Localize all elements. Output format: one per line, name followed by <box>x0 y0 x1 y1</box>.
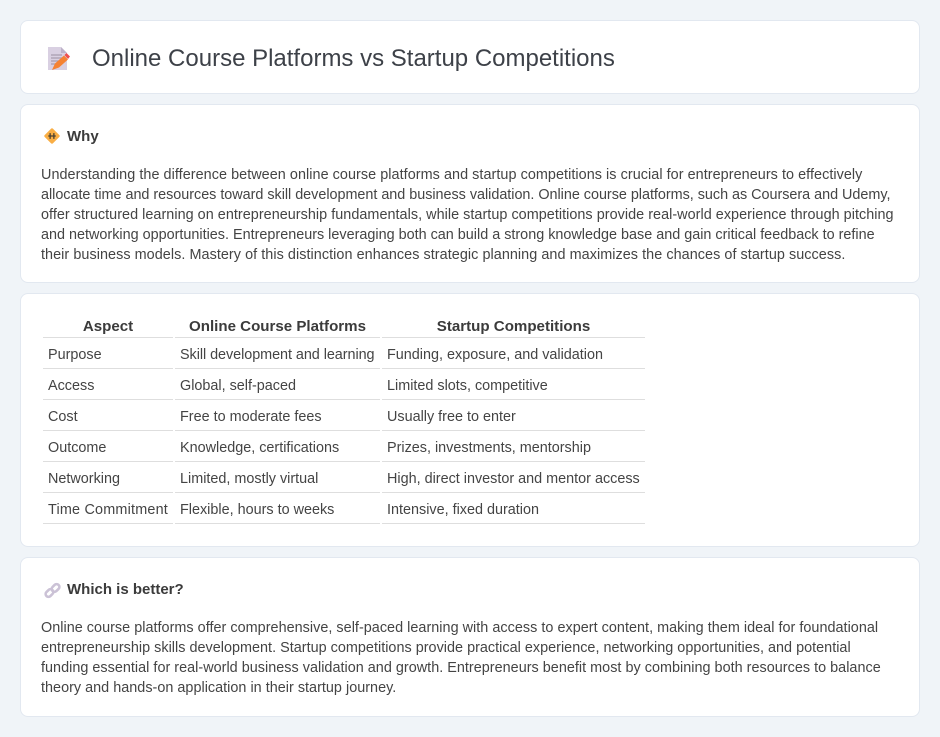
row: networking: Limited, mostly virtual <box>180 471 318 487</box>
text: why paragraph: their business models. Mastery of this distinction enhances strategic planning and maximizes the chances of startup success. <box>41 247 845 263</box>
icon: memo with pencil <box>48 47 70 70</box>
row: outcome: Outcome <box>48 440 106 456</box>
panel: title header <box>20 20 920 94</box>
heading: why: Why <box>67 128 99 145</box>
table header row <box>83 318 590 335</box>
row: time commitment: Intensive, fixed duration <box>387 502 539 518</box>
text: which is better paragraph <box>41 620 881 696</box>
panel: why <box>20 104 920 283</box>
row: time commitment: Flexible, hours to weeks <box>180 502 334 518</box>
row: outcome: Knowledge, certifications <box>180 440 339 456</box>
text: which is better paragraph: theory and hands-on application in their startup journey. <box>41 680 396 696</box>
row: access: Access <box>48 378 94 394</box>
row: networking: Networking <box>48 471 120 487</box>
row: purpose: Skill development and learning <box>180 347 374 363</box>
row: networking: High, direct investor and mentor access <box>387 471 640 487</box>
table: comparison <box>43 318 645 524</box>
text: which is better paragraph: Online course platforms offer comprehensive, self-paced learning with access to expert content, making them ideal for foundational <box>41 620 878 636</box>
table header row: Aspect <box>83 318 133 335</box>
text: which is better paragraph: entrepreneurship skills development. Startup competitions provide practical experience, networking opportunities, and potential <box>41 640 851 656</box>
text: why paragraph: Understanding the difference between online course platforms and startup competitions is crucial for entrepreneurs to effectively <box>41 167 862 183</box>
icon: link <box>44 582 61 598</box>
panel: comparison table <box>20 293 920 547</box>
row: cost: Usually free to enter <box>387 409 516 425</box>
row: networking <box>48 471 640 487</box>
row: cost <box>48 409 516 425</box>
row: cost: Free to moderate fees <box>180 409 322 425</box>
row: purpose <box>48 347 603 363</box>
text: which is better paragraph: funding essential for real-world business validation and growth. Entrepreneurs benefit most by combining both resources to balance <box>41 660 881 676</box>
row: outcome: Prizes, investments, mentorship <box>387 440 591 456</box>
row: outcome <box>48 440 591 456</box>
row: access: Global, self-paced <box>180 378 296 394</box>
row: access <box>48 378 548 394</box>
row: time commitment <box>48 502 539 518</box>
title: Online Course Platforms vs Startup Competitions <box>92 45 615 72</box>
text: why paragraph: offer structured learning on entrepreneurship fundamentals, while startup competitions provide real-world experience through pitching <box>41 207 894 223</box>
row: access: Limited slots, competitive <box>387 378 548 394</box>
row: time commitment: Time Commitment <box>48 502 168 518</box>
row: cost: Cost <box>48 409 78 425</box>
table header row: Startup Competitions <box>437 318 590 335</box>
text: why paragraph: allocate time and resources toward skill development and business validation. Online course platforms, such as Coursera and Udemy, <box>41 187 890 203</box>
row: purpose: Funding, exposure, and validation <box>387 347 603 363</box>
panel: which is better <box>20 557 920 717</box>
icon: construction diamond <box>44 128 60 144</box>
row: purpose: Purpose <box>48 347 102 363</box>
heading: which is better: Which is better? <box>67 581 184 598</box>
table header row: Online Course Platforms <box>189 318 366 335</box>
text: why paragraph <box>41 167 894 263</box>
text: why paragraph: and networking opportunities. Entrepreneurs leveraging both can build a strong knowledge base and gain critical feedback to refine <box>41 227 875 243</box>
